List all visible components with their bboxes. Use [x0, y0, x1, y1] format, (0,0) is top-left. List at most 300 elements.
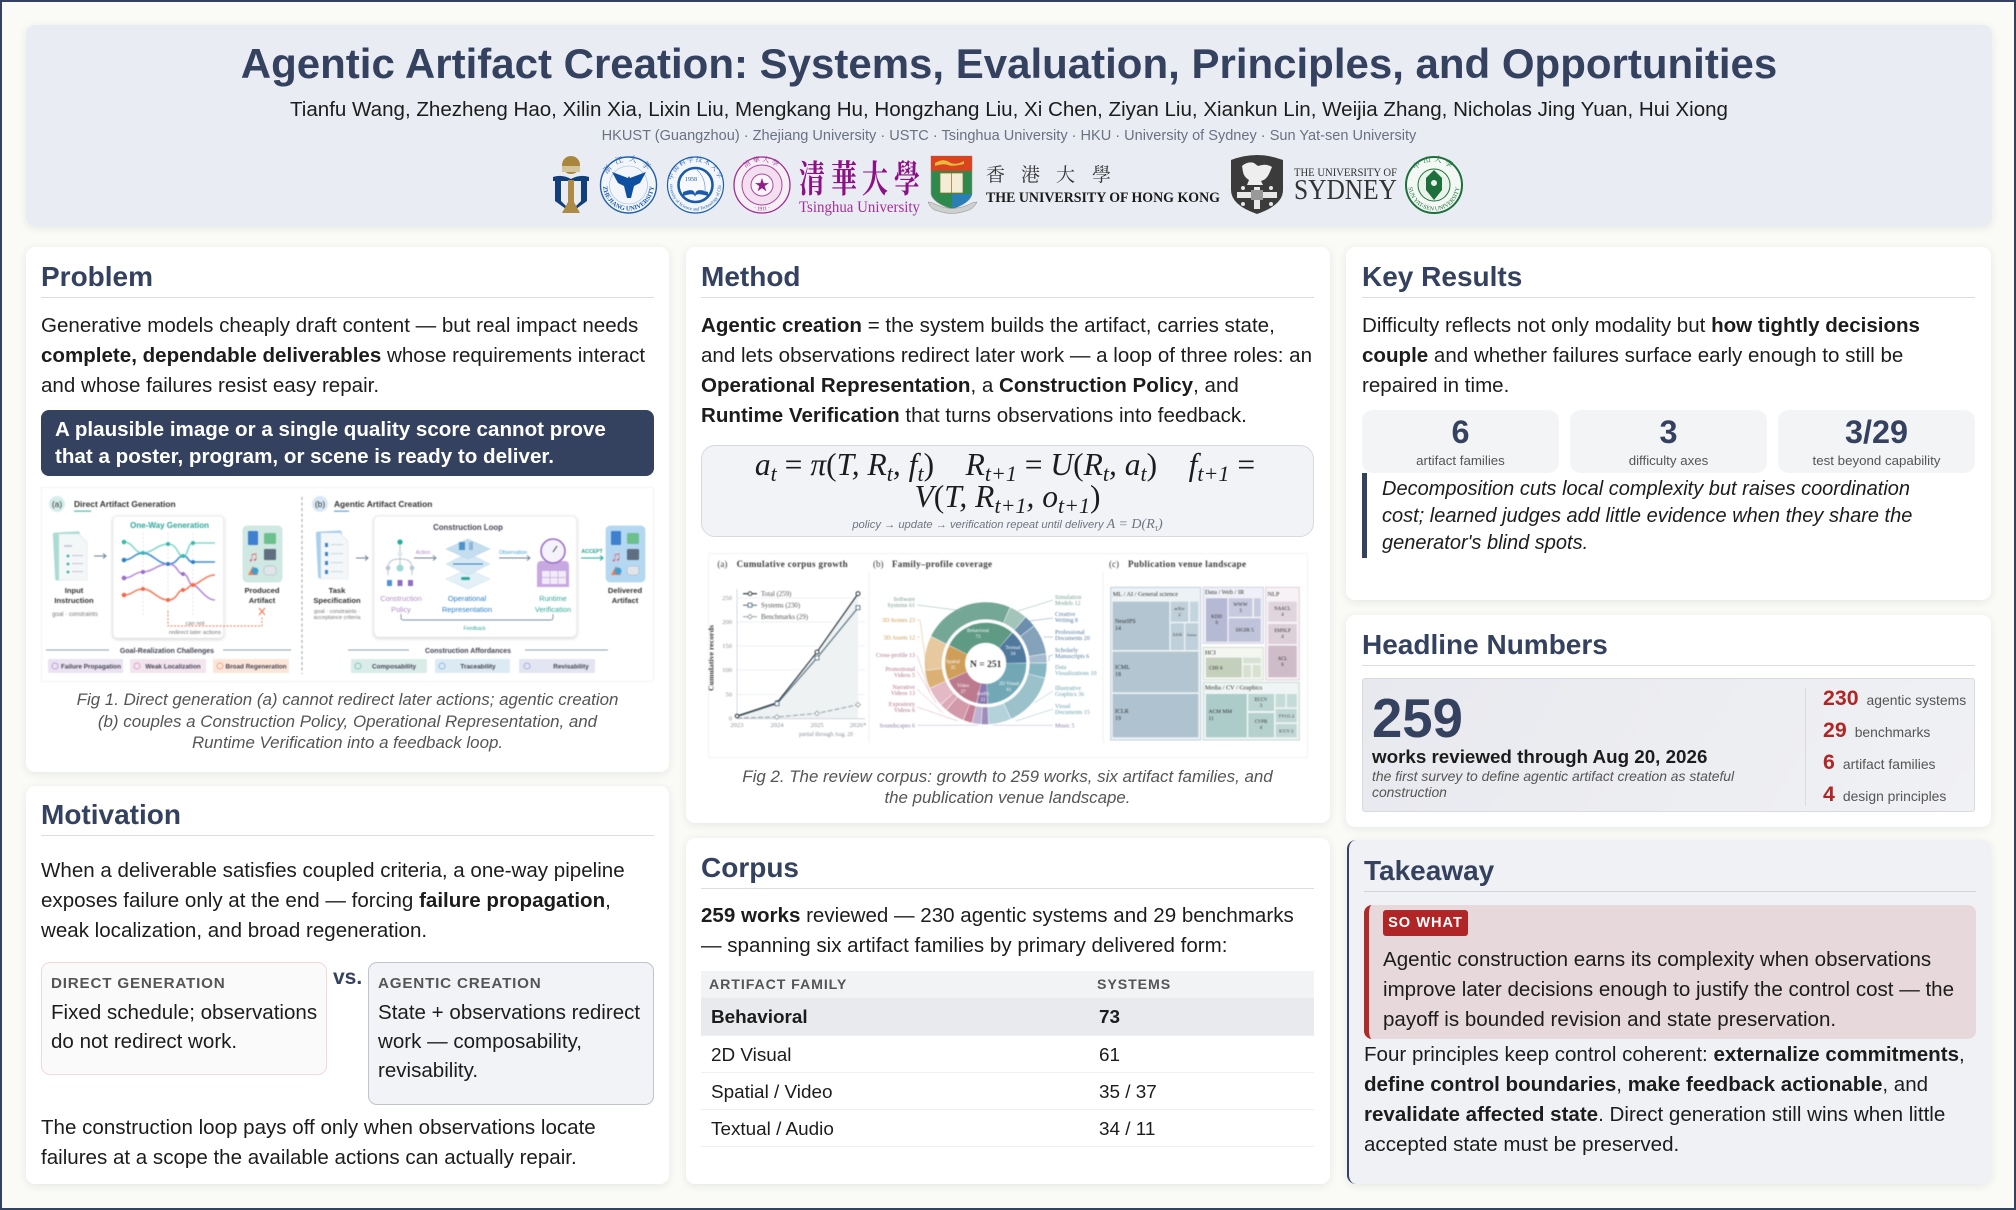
label: agentic creation: AGENTIC CREATION — [378, 975, 542, 992]
icon: University of Sydney wordmark: SYDNEY — [1294, 174, 1397, 206]
table: artifact families: 73 — [1099, 1007, 1120, 1028]
motivation text: When a deliverable satisfies coupled criteria, a one-way pipeline — [41, 859, 625, 882]
icon: representation stack — [446, 539, 490, 589]
venue group: Media / CV / Graphics — [1203, 682, 1299, 740]
callout text — [1383, 948, 1954, 1031]
key results text — [1362, 314, 1920, 396]
venue group: ML / AI: 19 — [1115, 716, 1121, 722]
input instruction: goal · constraints — [52, 612, 98, 618]
icon: HKUST logo — [553, 156, 589, 213]
problem text: complete, dependable deliverables whose requirements interact — [41, 344, 645, 366]
venue group: Data / Web / IR: 3 — [1239, 609, 1242, 614]
sunburst center and inner labels: Textual — [1006, 646, 1021, 651]
table: artifact families — [701, 971, 1314, 1147]
heading: Method — [701, 258, 1314, 298]
big number note — [1372, 768, 1734, 800]
sunburst leader labels: right: Models 12 — [1055, 601, 1080, 607]
venue group: Media / CV / Graphics: TVCG 2 — [1278, 714, 1295, 718]
one-way generation panel: can not — [185, 621, 205, 627]
venue group: Data / Web / IR: KDD — [1211, 615, 1222, 620]
quote: cost; learned judges add little evidence when they share the — [1382, 505, 1912, 527]
method text: Agentic creation = the system builds the artifact, carries state, — [701, 314, 1275, 336]
label: direct generation: DIRECT GENERATION — [51, 975, 225, 992]
venue group: Media / CV / Graphics: 4 — [1260, 726, 1263, 731]
delivered artifact: Delivered — [608, 586, 642, 595]
icon: Tsinghua seal: 清華大學 — [743, 156, 779, 168]
sunburst leader labels: left: 3D Scenes 23 — [882, 618, 915, 624]
callout: plausible image: that a poster, program, or scene is ready to deliver. — [55, 444, 554, 468]
icon: Tsinghua wordmark: 學 — [893, 159, 920, 201]
accept arrow: ACCEPT — [581, 549, 603, 555]
venue group: ML / AI: arXiv — [1174, 606, 1185, 611]
sunburst leader labels: left: Systems 61 — [887, 603, 915, 609]
icon: HKU wordmark: 學 — [1092, 164, 1111, 186]
text: direct generation: do not redirect work. — [51, 1030, 237, 1053]
big number note: construction — [1372, 784, 1447, 800]
icon: HKU wordmark: 香 — [986, 164, 1005, 186]
sunburst leader labels: left: Cross-profile 13 — [876, 652, 915, 659]
construction loop panel: Operational — [448, 594, 486, 603]
one-way generation panel: One-Way Generation — [130, 521, 209, 530]
arrow — [94, 554, 106, 558]
big number 259: 259 — [1372, 688, 1463, 749]
construction loop panel: Policy — [391, 605, 411, 614]
construction affordances: Traceability — [460, 664, 496, 670]
construction loop panel: Runtime — [539, 594, 567, 603]
chart titles: Publication venue landscape — [1128, 559, 1246, 569]
big number note: the first survey to define agentic artifact creation as stateful — [1372, 768, 1734, 784]
task specification: Specification — [313, 596, 361, 605]
sunburst leader labels: right: Creative — [1055, 612, 1076, 618]
stat: test beyond capability — [1778, 410, 1975, 473]
venue group: Data / Web / IR: SIGIR 5 — [1235, 628, 1254, 634]
title: Agentic Artifact Creation: Systems, Evaluation, Principles, and Opportunities — [241, 40, 1777, 87]
line chart: cumulative growth: 2026* — [850, 722, 866, 729]
goal-realization challenges: Failure Propagation — [61, 664, 121, 670]
sunburst leader labels: left: Expository — [889, 702, 915, 708]
method text: Operational Representation, a Construction Policy, and — [701, 374, 1239, 396]
delivered artifact — [606, 526, 645, 605]
number: artifact families: 6 artifact families — [1823, 750, 1936, 774]
produced artifact: ♫ — [248, 548, 258, 564]
icon: Tsinghua wordmark: 華 — [831, 159, 857, 201]
callout: so what — [1364, 905, 1976, 1039]
sunburst leader labels: right: Illustrative — [1055, 686, 1081, 692]
sunburst: family-profile coverage — [933, 611, 1038, 716]
icon: Tsinghua seal: ★ — [754, 178, 770, 194]
sunburst center and inner labels — [946, 629, 1021, 703]
number: agentic systems: 230 agentic systems — [1823, 686, 1966, 710]
treemap: publication venues — [1111, 587, 1299, 740]
motivation text — [41, 859, 625, 942]
venue group: ML / AI — [1111, 587, 1201, 740]
heading: Method: Method — [701, 261, 801, 292]
table: artifact families: SYSTEMS — [1097, 977, 1171, 993]
part a header — [49, 496, 176, 512]
venue group: Media / CV / Graphics: CVPR — [1255, 720, 1268, 725]
chart titles — [717, 559, 1246, 569]
table: artifact families: Textual / Audio — [711, 1118, 834, 1140]
callout: plausible image — [41, 410, 654, 476]
formula line 2: V(T, Rt+1, ot+1) — [914, 479, 1100, 518]
heading: Motivation — [41, 796, 654, 836]
input instruction: Instruction — [54, 596, 94, 605]
principles text: Four principles keep control coherent: externalize commitments, — [1364, 1043, 1965, 1066]
key results text: couple and whether failures surface early enough to still be — [1362, 344, 1903, 366]
figure 2 caption: the publication venue landscape. — [884, 788, 1131, 807]
venue group: NLP: 6 — [1281, 663, 1284, 668]
task specification: goal · constraints · — [314, 609, 360, 615]
line chart: cumulative growth: 200 — [722, 619, 733, 626]
sunburst leader labels: right — [993, 595, 1096, 730]
line chart: cumulative growth: 0 — [729, 716, 733, 722]
closing text: failures at a scope the available actions can actually repair. — [41, 1146, 577, 1169]
line chart: cumulative growth — [706, 589, 866, 738]
heading: Problem: Problem — [41, 261, 153, 292]
venue group: NLP: 4 — [1281, 635, 1284, 640]
comparison card: direct generation — [41, 962, 327, 1075]
authors: Tianfu Wang, Zhezheng Hao, Xilin Xia, Lixin Liu, Mengkang Hu, Hongzhang Liu, Xi Chen, Ziyan Liu, Xiankun Lin, Weijia Zhang, Nicholas Jing Yuan, Hui Xiong — [290, 98, 1728, 121]
method text: and lets observations redirect later work — a loop of three roles: an — [701, 344, 1312, 366]
sunburst center and inner labels: 35 — [950, 666, 956, 671]
produced artifact — [243, 526, 282, 605]
chart legend: Systems (230) — [761, 602, 800, 610]
venue group: Data / Web / IR: 6 — [1215, 621, 1218, 626]
key results text: Difficulty reflects not only modality but how tightly decisions — [1362, 314, 1920, 336]
vs label: vs. — [333, 966, 362, 989]
figure 1: direct vs agentic creation diagram — [46, 496, 646, 674]
sunburst center and inner labels: Spatial — [946, 660, 961, 665]
sunburst leader labels: left: Videos 5 — [894, 673, 915, 679]
venue group: Data / Web / IR — [1203, 587, 1263, 643]
icon: University of Sydney crest — [1231, 155, 1283, 214]
heading: Takeaway: Takeaway — [1364, 855, 1494, 886]
sunburst leader labels: right: Writing 8 — [1055, 618, 1078, 624]
sunburst center and inner labels: 2D Visual — [999, 682, 1020, 687]
icon: USTC seal: 中国科学技术大学 — [668, 156, 723, 180]
construction loop panel: Action — [416, 550, 430, 556]
venue group: ML / AI: ML / AI / General science — [1113, 591, 1178, 598]
corpus text: — spanning six artifact families by primary delivered form: — [701, 934, 1227, 957]
panel: Key Results — [1346, 247, 1991, 600]
input instruction — [52, 531, 98, 618]
icon: policy tree — [386, 539, 414, 586]
stat: artifact families — [1362, 410, 1559, 473]
goal-realization challenges: Broad Regeneration — [225, 664, 287, 670]
sunburst leader labels: right: Documents 15 — [1055, 710, 1090, 716]
venue group: NLP: NAACL — [1274, 607, 1291, 612]
big number caption: works reviewed through Aug 20, 2026 — [1372, 746, 1707, 767]
delivered artifact: ♫ — [611, 548, 621, 564]
heading: Corpus: Corpus — [701, 852, 799, 883]
venue group: ML / AI: 14 — [1115, 626, 1121, 632]
icon: USTC seal — [666, 156, 724, 214]
figure 2 caption — [742, 766, 1274, 807]
callout text: improve later decisions enough to justify the control cost — the — [1383, 978, 1954, 1001]
sunburst leader labels: right: Simulation — [1055, 595, 1081, 601]
line chart: cumulative growth: 2023 — [730, 722, 744, 729]
chart titles: (a) — [717, 559, 727, 569]
chart legend: Benchmarks (29) — [761, 614, 808, 621]
stat: artifact families: artifact families — [1416, 453, 1505, 468]
text: agentic creation: revisability. — [378, 1059, 478, 1082]
sunburst center and inner labels: 11 — [981, 698, 986, 703]
venue group: NLP — [1266, 587, 1299, 680]
number: benchmarks: 29 benchmarks — [1823, 718, 1930, 742]
figure 2 caption: Fig 2. The review corpus: growth to 259 works, six artifact families, and — [742, 766, 1273, 786]
sunburst center and inner labels: 34 — [1010, 652, 1016, 657]
sunburst leader labels: left: Software — [893, 596, 915, 603]
stat: artifact families: 6 — [1451, 414, 1470, 450]
venue group: Data / Web / IR: WWW — [1233, 603, 1248, 608]
construction loop panel: Observation — [499, 550, 527, 556]
task specification — [313, 530, 361, 621]
panel: Takeaway — [1347, 840, 1991, 1184]
construction loop panel — [374, 516, 577, 637]
line chart: cumulative growth: 150 — [722, 643, 733, 650]
stat: test beyond capability: 3/29 — [1845, 414, 1908, 450]
sunburst center and inner labels: 37 — [960, 690, 966, 695]
sunburst leader labels: right: Data — [1055, 665, 1067, 671]
icon: Tsinghua wordmark: 清 — [799, 159, 825, 201]
figure 2: corpus charts — [708, 559, 1300, 742]
method text — [701, 314, 1312, 426]
venue group: ML / AI: AAAI — [1173, 633, 1183, 637]
construction loop panel: Construction Loop — [433, 523, 503, 532]
key results text: repaired in time. — [1362, 374, 1509, 396]
goal-realization challenges: Weak Localization — [145, 664, 201, 670]
sunburst leader labels: left: 3D Assets 12 — [883, 636, 915, 642]
icon: Zhejiang University seal: ZHEJIANG UNIVERSITY — [603, 186, 654, 211]
figure 1 caption: Fig 1. Direct generation (a) cannot redirect later actions; agentic creation — [77, 690, 618, 709]
callout text: Agentic construction earns its complexity when observations — [1383, 948, 1931, 971]
sunburst leader labels: right: Manuscripts 6 — [1055, 654, 1089, 660]
heading: Takeaway — [1364, 852, 1976, 892]
line chart: cumulative growth: 250 — [722, 595, 733, 602]
icon: Tsinghua wordmark: 大 — [862, 159, 888, 201]
principles text: accepted state must be preserved. — [1364, 1133, 1679, 1156]
quote — [1362, 473, 1975, 558]
venue group: ML / AI: NeurIPS — [1115, 619, 1136, 625]
venue group: Data / Web / IR: Data / Web / IR — [1205, 589, 1245, 596]
part b header: Agentic Artifact Creation — [334, 499, 432, 509]
callout text: payoff is bounded revision and state preservation. — [1383, 1008, 1836, 1031]
chart titles: Cumulative corpus growth — [737, 559, 848, 569]
chart titles: (b) — [873, 559, 884, 569]
icon: Zhejiang University seal — [600, 155, 658, 214]
icon: Tsinghua seal — [733, 156, 791, 214]
goal-realization challenges — [46, 648, 291, 673]
icon: HKU crest — [928, 156, 977, 214]
venue group: NLP: 4 — [1281, 613, 1284, 618]
part a header: (a) — [52, 499, 62, 509]
line chart: cumulative growth: 2025 — [810, 722, 824, 729]
table: artifact families: Behavioral — [711, 1007, 808, 1028]
problem text: Generative models cheaply draft content — but real impact needs — [41, 314, 638, 336]
heading: Key Results: Key Results — [1362, 261, 1522, 292]
stat: difficulty axes — [1570, 410, 1767, 473]
quote: generator's blind spots. — [1382, 532, 1588, 554]
closing text — [41, 1116, 596, 1169]
venue group: Media / CV / Graphics: 3 — [1260, 704, 1263, 709]
venue group: ML / AI: Nature — [1187, 633, 1197, 637]
stat: test beyond capability: test beyond capability — [1813, 453, 1940, 468]
panel: Problem — [26, 247, 669, 772]
method text: Runtime Verification that turns observations into feedback. — [701, 404, 1247, 426]
icon: Tsinghua wordmark — [799, 159, 920, 216]
chart titles: Family–profile coverage — [892, 559, 992, 569]
panel: Method — [686, 247, 1330, 823]
panel: Headline Numbers — [1346, 615, 1991, 827]
text: agentic creation — [378, 1001, 640, 1082]
icon: Tsinghua seal: · 1911 · — [754, 206, 770, 210]
motivation text: exposes failure only at the end — forcing failure propagation, — [41, 889, 611, 912]
sunburst leader labels: left: Soundscapes 6 — [880, 724, 915, 730]
text: agentic creation: State + observations redirect — [378, 1001, 640, 1024]
icon: HKU wordmark: THE UNIVERSITY OF HONG KONG — [986, 190, 1220, 206]
venue group: ML / AI: 2 — [1178, 612, 1181, 617]
figure 1 caption — [77, 690, 618, 752]
construction loop panel: Feedback — [464, 626, 486, 632]
part b header: (b) — [315, 499, 325, 509]
vertical divider — [1805, 688, 1806, 806]
table: artifact families: Spatial / Video — [711, 1082, 832, 1102]
part a header: Direct Artifact Generation — [74, 499, 176, 509]
input instruction: Input — [65, 586, 84, 595]
venue group: NLP: NLP — [1268, 591, 1280, 598]
delivered artifact: Artifact — [612, 596, 639, 605]
figure 1 caption: Runtime Verification into a feedback loop. — [192, 733, 503, 752]
produced artifact: Produced — [244, 586, 280, 595]
text: direct generation — [51, 1001, 317, 1053]
sunburst leader labels: right: Graphics 36 — [1055, 692, 1084, 698]
heading: Key Results — [1362, 258, 1975, 298]
badge: so what: SO WHAT — [1388, 915, 1463, 931]
line chart: cumulative growth: partial through Aug. 20 — [799, 732, 853, 738]
icon: Sun Yat-sen University seal: SUN YAT-SEN UNIVERSITY — [1408, 186, 1460, 211]
sunburst leader labels: right: Music 5 — [1055, 724, 1074, 730]
panel: Corpus — [686, 838, 1330, 1184]
text: agentic creation: work — composability, — [378, 1030, 582, 1053]
table: artifact families: 35 / 37 — [1099, 1082, 1157, 1102]
venue group: NLP: ACL — [1278, 657, 1287, 662]
chart legend — [743, 591, 808, 621]
task specification: acceptance criteria — [314, 615, 361, 621]
icon: HKU wordmark — [986, 164, 1220, 206]
formula line 1: at = π(T, Rt, ft) Rt+1 = U(Rt, at) ft+1 = — [755, 447, 1255, 486]
sunburst center and inner labels: Audio — [977, 692, 990, 697]
heading: Problem — [41, 258, 654, 298]
corpus text — [701, 904, 1294, 957]
principles text: define control boundaries, make feedback actionable, and — [1364, 1073, 1928, 1096]
problem text: and whose failures resist easy repair. — [41, 374, 379, 396]
sunburst center and inner labels: 61 — [1006, 688, 1012, 693]
task specification: Task — [329, 586, 346, 595]
callout: plausible image: A plausible image or a single quality score cannot prove — [55, 418, 606, 441]
line chart: cumulative growth: 100 — [722, 667, 733, 674]
quote: Decomposition cuts local complexity but raises coordination — [1382, 478, 1910, 500]
venue group: Media / CV / Graphics: ACM MM — [1208, 709, 1232, 715]
table: artifact families: 2D Visual — [711, 1044, 792, 1066]
venue group: ML / AI: 18 — [1115, 672, 1121, 678]
motivation text: weak localization, and broad regeneration. — [41, 919, 427, 942]
construction affordances: Revisability — [553, 664, 589, 670]
goal-realization challenges: Goal-Realization Challenges — [120, 648, 214, 655]
sunburst leader labels: left: Narrative — [892, 685, 915, 691]
heading: Corpus — [701, 849, 1314, 889]
sunburst center and inner labels: 73 — [976, 635, 981, 640]
sunburst leader labels: right: Visualizations 10 — [1055, 671, 1096, 677]
stat: difficulty axes: 3 — [1659, 414, 1678, 450]
sunburst center and inner labels: N = 251 — [970, 660, 1002, 670]
venue group: HCI: CHI 6 — [1209, 666, 1223, 672]
heading: Headline Numbers: Headline Numbers — [1362, 629, 1608, 660]
comparison card: agentic creation — [368, 962, 654, 1105]
panel: Motivation — [26, 786, 669, 1184]
affiliations: HKUST (Guangzhou) · Zhejiang University · USTC · Tsinghua University · HKU · University of Sydney · Sun Yat-sen University — [602, 128, 1416, 144]
venue group: ML / AI: ICML — [1115, 665, 1130, 671]
table: artifact families: 61 — [1099, 1044, 1120, 1066]
big number block — [1362, 678, 1975, 812]
accept arrow — [581, 549, 603, 560]
closing text: The construction loop pays off only when observations locate — [41, 1116, 596, 1139]
construction loop panel: Representation — [442, 605, 492, 614]
sunburst leader labels: right: Scholarly — [1055, 648, 1078, 654]
one-way generation panel — [113, 516, 265, 638]
table: artifact families: ARTIFACT FAMILY — [709, 977, 847, 993]
sunburst leader labels: left: Videos 6 — [894, 708, 915, 714]
text: direct generation: Fixed schedule; observations — [51, 1001, 317, 1024]
venue group: HCI — [1203, 647, 1263, 680]
one-way generation panel: redirect later actions — [169, 630, 221, 636]
sunburst leader labels: left: Videos 13 — [891, 691, 915, 697]
chart legend: Total (259) — [761, 591, 791, 598]
heading: Headline Numbers — [1362, 626, 1975, 666]
part b header — [312, 496, 432, 512]
venue group: HCI: HCI — [1205, 650, 1216, 656]
icon: HKU wordmark: 港 — [1021, 164, 1040, 186]
outer ring — [933, 611, 1038, 716]
formula note: policy → update → verification repeat until delivery A = D(Rτ) — [852, 517, 1163, 533]
badge: so what — [1383, 910, 1468, 936]
construction affordances: Construction Affordances — [425, 648, 511, 655]
construction affordances: Composability — [372, 664, 416, 670]
chart titles: (c) — [1109, 559, 1119, 569]
construction affordances — [348, 648, 608, 673]
number: design principles: 4 design principles — [1823, 782, 1946, 806]
sunburst leader labels: left: Promotional — [885, 667, 915, 673]
inner ring — [955, 633, 1016, 694]
construction loop panel: Construction — [380, 594, 422, 603]
sunburst center and inner labels: Video — [957, 684, 969, 689]
sunburst center and inner labels: Behavioral — [967, 629, 990, 634]
principles text: revalidate affected state. Direct generation still wins when little — [1364, 1103, 1945, 1126]
heading: Motivation: Motivation — [41, 799, 181, 830]
university logos — [553, 155, 1463, 216]
construction loop panel: Verification — [535, 605, 571, 614]
venue group: Media / CV / Graphics: Media / CV / Graphics — [1205, 684, 1263, 692]
icon: HKU wordmark: 大 — [1056, 164, 1075, 186]
line chart: cumulative growth: 50 — [725, 692, 733, 698]
sunburst leader labels: right: Documents 20 — [1055, 636, 1090, 642]
icon: Tsinghua wordmark: Tsinghua University — [799, 199, 920, 216]
venue group: Media / CV / Graphics: ECCV — [1255, 698, 1268, 703]
venue group: Media / CV / Graphics: ICCV 2 — [1279, 728, 1294, 734]
secondary numbers — [1823, 686, 1966, 806]
produced artifact: Artifact — [249, 596, 276, 605]
sunburst leader labels: right: Professional — [1055, 629, 1085, 636]
icon: Sun Yat-sen University seal: 中山大學 — [1414, 156, 1454, 168]
